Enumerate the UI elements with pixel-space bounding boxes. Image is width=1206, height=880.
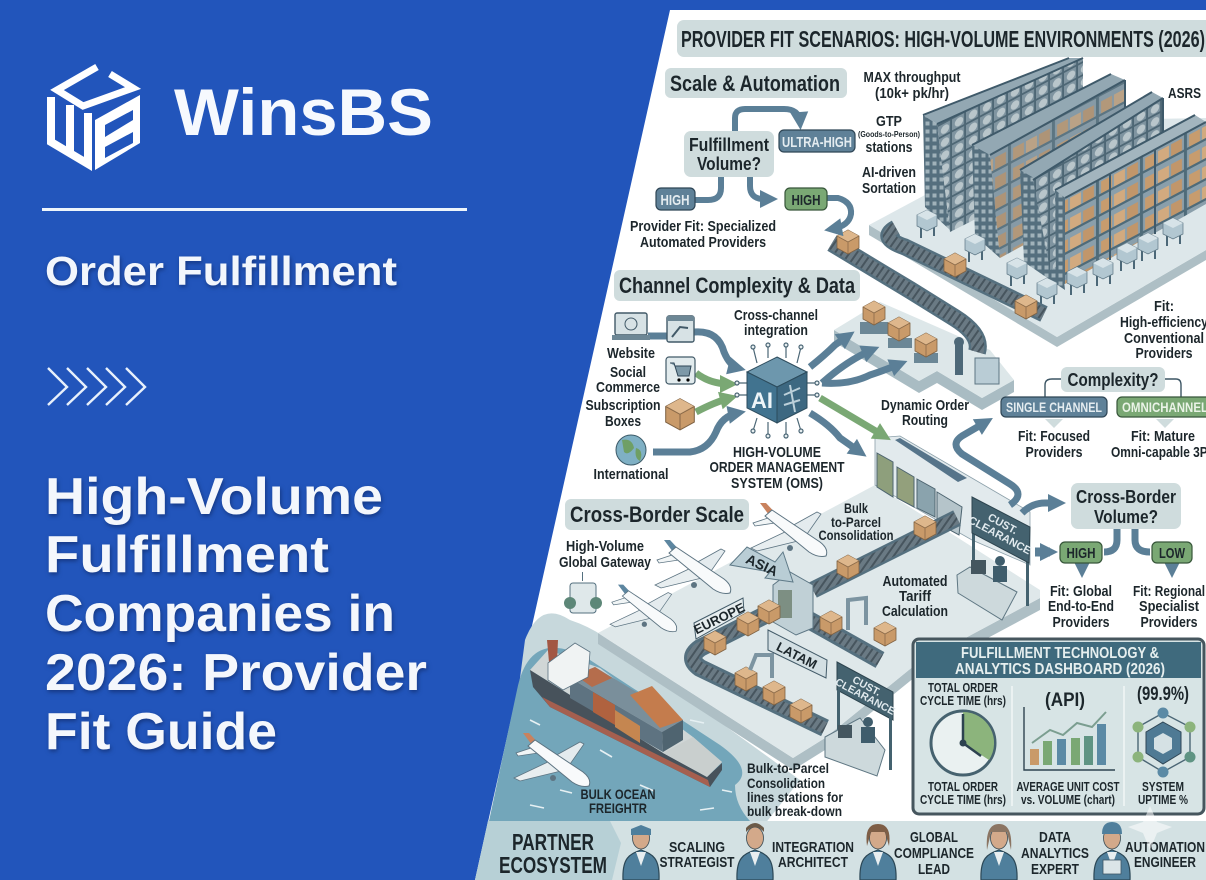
sea and coast background bbox=[489, 613, 800, 830]
customs booth upper: CLEARANCE bbox=[966, 514, 1033, 557]
tag: high: HIGH bbox=[1066, 545, 1096, 562]
text: global gateway: High-Volume bbox=[566, 538, 644, 555]
plane: third bbox=[610, 585, 677, 632]
column dividers bbox=[1012, 686, 1124, 806]
scanner gate bbox=[773, 572, 813, 635]
tag: single channel: SINGLE CHANNEL bbox=[1006, 400, 1102, 415]
text: automated tariff: Automated bbox=[882, 573, 948, 590]
text: consolidation lines: Consolidation bbox=[747, 775, 825, 791]
text: automated tariff: Calculation bbox=[882, 603, 948, 620]
flow arrows: fulfillment volume bbox=[695, 109, 851, 229]
text: dynamic order routing: Dynamic Order bbox=[881, 397, 969, 414]
robot arms bbox=[750, 598, 866, 678]
plane: ocean bbox=[514, 733, 590, 786]
text: website: Website bbox=[607, 345, 655, 362]
icon: shopping cart bbox=[666, 357, 695, 384]
text: bulk ocean freighter: FREIGHTR bbox=[589, 800, 647, 816]
metric: uptime: SYSTEM bbox=[1142, 780, 1184, 794]
metric: cycle time: TOTAL ORDER bbox=[928, 780, 998, 794]
icon: chevrons bbox=[48, 368, 145, 405]
flow arrows: channels to OMS bbox=[648, 332, 900, 452]
main title bbox=[45, 468, 427, 761]
customs booth upper: CUST. bbox=[986, 512, 1019, 537]
text: consolidation lines: bulk break-down bbox=[747, 803, 842, 819]
text: fit regional bbox=[1133, 583, 1205, 631]
tag: high bbox=[1060, 542, 1102, 563]
text: GTP stations: GTP bbox=[876, 113, 902, 130]
packing stations bbox=[917, 210, 1183, 306]
cross-border platform bbox=[598, 485, 1040, 770]
text: fit global bbox=[1048, 583, 1114, 631]
metric: unit cost chart bbox=[1016, 690, 1120, 807]
metric: unit cost chart: (API) bbox=[1045, 690, 1085, 711]
customs booth lower bbox=[825, 662, 897, 776]
heading: title bar bbox=[677, 20, 1206, 57]
text: subscription boxes bbox=[586, 397, 660, 430]
ASRS racks bbox=[923, 58, 1206, 290]
decision: fulfillment volume bbox=[684, 131, 774, 177]
text: subscription boxes: Boxes bbox=[605, 413, 641, 430]
category label: Order Fulfillment bbox=[45, 248, 397, 294]
metric: cycle time: CYCLE TIME (hrs) bbox=[920, 694, 1006, 708]
heading: cross-border scale: Cross-Border Scale bbox=[570, 502, 744, 527]
text: cross-channel integration bbox=[734, 307, 818, 339]
text: max throughput bbox=[864, 69, 961, 102]
text: bulk to parcel: Consolidation bbox=[818, 527, 894, 543]
sign: Latam: LATAM bbox=[774, 639, 820, 672]
text: OMS label: ORDER MANAGEMENT bbox=[710, 459, 844, 476]
plane: second bbox=[655, 540, 731, 594]
text: max throughput: (10k+ pk/hr) bbox=[875, 85, 949, 102]
logo: WinsBS cube mark bbox=[51, 67, 140, 170]
text: provider fit specialized: Provider Fit: Specialized bbox=[630, 218, 776, 235]
text: fit global: Providers bbox=[1052, 614, 1110, 631]
metric: uptime bbox=[1132, 684, 1196, 807]
main title: 2026: Provider bbox=[45, 644, 427, 702]
icon: website laptop bbox=[612, 313, 650, 340]
customs booth lower: CLEARANCE bbox=[833, 676, 897, 718]
person: scaling strategist bbox=[623, 825, 734, 880]
text: automated tariff bbox=[882, 573, 948, 620]
person: scaling strategist: SCALING bbox=[669, 839, 725, 856]
text: fit focused: Providers bbox=[1026, 444, 1082, 461]
icon: AI cube: AI bbox=[751, 388, 773, 413]
text: fit global: End-to-End bbox=[1048, 598, 1114, 615]
tag: high blue bbox=[656, 188, 695, 210]
panel: partner ecosystem strip bbox=[475, 821, 1206, 880]
text: max throughput: MAX throughput bbox=[864, 69, 961, 86]
person: data analytics expert: DATA bbox=[1039, 829, 1071, 846]
icon: AI cube bbox=[735, 343, 819, 438]
ship bbox=[530, 640, 722, 787]
heading tab: PARTNER bbox=[512, 829, 594, 855]
customs booth lower: CUST. bbox=[850, 674, 883, 699]
decision: fulfillment volume: Volume? bbox=[697, 154, 761, 174]
decision: cross-border volume bbox=[1071, 483, 1181, 529]
text: AI-driven sortation bbox=[862, 164, 916, 197]
text: high-efficiency conventional fit: Providers bbox=[1136, 345, 1192, 362]
person: integration architect: ARCHITECT bbox=[778, 854, 848, 871]
person: global compliance lead: LEAD bbox=[918, 861, 950, 878]
text: fit focused bbox=[1018, 428, 1090, 461]
person: automation engineer bbox=[1094, 822, 1205, 880]
text: high-efficiency conventional fit bbox=[1120, 298, 1206, 362]
divider line bbox=[42, 208, 467, 211]
text: global gateway bbox=[559, 538, 652, 571]
sign: Latam bbox=[768, 630, 827, 678]
text: OMS label: SYSTEM (OMS) bbox=[731, 475, 823, 492]
watermark sparkle bbox=[1128, 806, 1172, 850]
text: GTP stations bbox=[858, 113, 920, 156]
person: global compliance lead: COMPLIANCE bbox=[894, 845, 974, 862]
tag: high blue: HIGH bbox=[660, 192, 690, 209]
main title: High-Volume bbox=[45, 468, 383, 526]
tag: high green: HIGH bbox=[792, 192, 820, 209]
text: consolidation lines: lines stations for bbox=[747, 789, 843, 805]
person: data analytics expert bbox=[981, 824, 1089, 880]
tag: ultra-high: ULTRA-HIGH bbox=[782, 134, 852, 151]
metric: cycle time: CYCLE TIME (hrs) bbox=[920, 793, 1006, 807]
text: social commerce: Commerce bbox=[596, 379, 660, 396]
text: subscription boxes: Subscription bbox=[586, 397, 660, 414]
text: consolidation lines: Bulk-to-Parcel bbox=[747, 760, 829, 776]
text: provider fit specialized: Automated Providers bbox=[640, 234, 766, 251]
decision: complexity: Complexity? bbox=[1068, 370, 1158, 390]
heading tab: ECOSYSTEM bbox=[499, 852, 607, 878]
sign: Asia bbox=[730, 547, 793, 582]
tag: single channel bbox=[1001, 397, 1107, 417]
packing platform bbox=[834, 302, 1014, 410]
text: bulk to parcel: Bulk bbox=[844, 500, 868, 516]
cross-border conveyors bbox=[693, 518, 957, 728]
metric: unit cost chart: AVERAGE UNIT COST bbox=[1016, 780, 1120, 794]
panel: infographic white area bbox=[475, 10, 1206, 880]
text: bulk to parcel: to-Parcel bbox=[831, 514, 881, 530]
text: cross-channel integration: integration bbox=[744, 322, 808, 339]
boxes on warehouse conveyors bbox=[837, 230, 1037, 319]
metric: uptime: (99.9%) bbox=[1137, 684, 1189, 705]
tag: low: LOW bbox=[1159, 545, 1186, 562]
icon: browser window bbox=[667, 316, 694, 342]
customs hall wall bbox=[875, 436, 1030, 565]
text: bulk to parcel bbox=[818, 500, 894, 543]
text: OMS label bbox=[710, 444, 844, 492]
text: GTP stations: stations bbox=[866, 139, 912, 156]
icon: box bbox=[666, 399, 694, 430]
person: global compliance lead: GLOBAL bbox=[910, 829, 958, 846]
icon: gateway terminal bbox=[564, 572, 602, 613]
brand name: WinsBS bbox=[174, 75, 433, 149]
text: social commerce bbox=[596, 364, 660, 396]
text: consolidation lines bbox=[747, 760, 843, 819]
heading: scale and automation: Scale & Automation bbox=[670, 71, 840, 96]
sorted parcels on pads bbox=[860, 301, 938, 363]
text: high-efficiency conventional fit: Fit: bbox=[1154, 298, 1174, 315]
text: global gateway: Global Gateway bbox=[559, 554, 652, 571]
tag: low bbox=[1152, 542, 1192, 563]
icon: globe bbox=[616, 435, 646, 465]
heading: channel complexity bbox=[614, 270, 860, 301]
decision: cross-border volume: Volume? bbox=[1094, 507, 1158, 527]
text: bulk ocean freighter bbox=[580, 786, 656, 816]
person: data analytics expert: ANALYTICS bbox=[1021, 845, 1089, 862]
text: automated tariff: Tariff bbox=[899, 588, 932, 605]
text: AI-driven sortation: AI-driven bbox=[862, 164, 916, 181]
parcels on cross-border conveyors bbox=[704, 516, 936, 723]
metric: cycle time: TOTAL ORDER bbox=[928, 681, 998, 695]
connector: complexity bracket bbox=[1045, 379, 1181, 397]
text: fit mature: Fit: Mature bbox=[1131, 428, 1195, 445]
metric: cycle time bbox=[920, 681, 1006, 807]
sign: Europe: EUROPE bbox=[691, 600, 747, 637]
person: scaling strategist: STRATEGIST bbox=[660, 854, 734, 871]
heading: channel complexity: Channel Complexity & Data bbox=[619, 273, 856, 298]
decision: complexity bbox=[1061, 367, 1165, 392]
text: fit global: Fit: Global bbox=[1050, 583, 1112, 600]
text: dynamic order routing: Routing bbox=[902, 412, 948, 429]
text: international: International bbox=[594, 466, 668, 483]
text: bulk ocean freighter: BULK OCEAN bbox=[580, 786, 656, 802]
warehouse floor bbox=[869, 118, 1206, 347]
dashboard header: ANALYTICS DASHBOARD (2026) bbox=[955, 661, 1165, 678]
metric: uptime: UPTIME % bbox=[1138, 793, 1188, 807]
metric: unit cost chart: vs. VOLUME (chart) bbox=[1021, 793, 1115, 807]
pointers under tags bbox=[1045, 419, 1174, 428]
panel: analytics dashboard bbox=[913, 639, 1204, 814]
decision: cross-border volume: Cross-Border bbox=[1076, 487, 1176, 507]
main title: Companies in bbox=[45, 585, 395, 643]
main title: Fit Guide bbox=[45, 703, 277, 761]
person: global compliance lead bbox=[860, 824, 974, 880]
tag: high green bbox=[785, 188, 827, 210]
text: OMS label: HIGH-VOLUME bbox=[733, 444, 821, 461]
dashboard header bbox=[916, 642, 1201, 678]
tag: ultra-high bbox=[779, 130, 855, 152]
text: cross-channel integration: Cross-channel bbox=[734, 307, 818, 324]
dashboard header: FULFILLMENT TECHNOLOGY & bbox=[961, 645, 1159, 662]
main title: Fulfillment bbox=[45, 526, 329, 584]
text: AI-driven sortation: Sortation bbox=[862, 180, 916, 197]
worker and packing station bbox=[954, 337, 999, 384]
person: data analytics expert: EXPERT bbox=[1031, 861, 1079, 878]
sign: Asia: ASIA bbox=[743, 551, 781, 579]
text: dynamic order routing bbox=[881, 397, 969, 429]
customs booth upper bbox=[957, 497, 1033, 620]
text: provider fit specialized bbox=[630, 218, 776, 251]
person: integration architect: INTEGRATION bbox=[772, 839, 854, 856]
conveyor lines bbox=[832, 228, 1044, 352]
text: social commerce: Social bbox=[610, 364, 646, 381]
heading tab bbox=[475, 821, 621, 880]
flow arrows: cross-border routing bbox=[956, 422, 1172, 570]
text: fit focused: Fit: Focused bbox=[1018, 428, 1090, 445]
text: GTP stations: (Goods-to-Person) bbox=[858, 130, 920, 139]
decision: fulfillment volume: Fulfillment bbox=[689, 135, 769, 155]
person: integration architect bbox=[737, 823, 854, 880]
text: fit mature bbox=[1111, 428, 1206, 461]
flow arrows: green channels bbox=[696, 373, 884, 436]
plane: upper gateway bbox=[751, 503, 827, 556]
